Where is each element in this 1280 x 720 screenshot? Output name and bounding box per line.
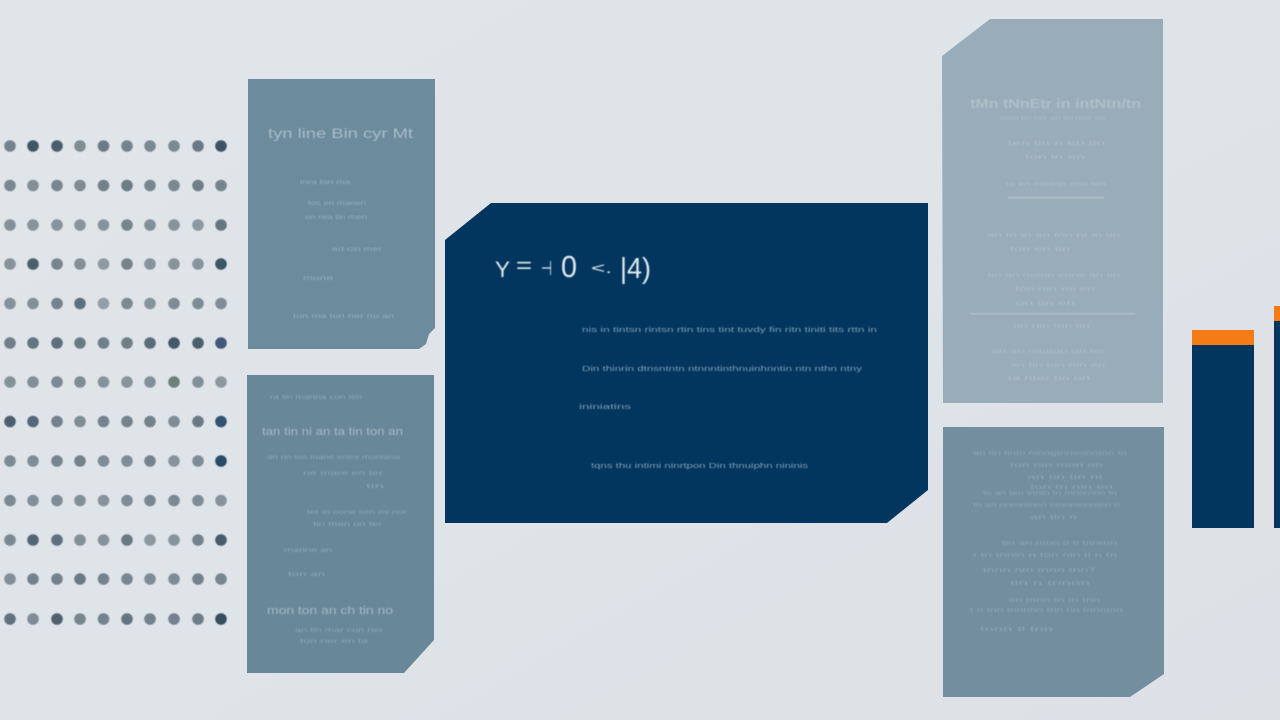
text block: lower right panel: ton nin mon en <box>1010 463 1103 469</box>
heading: center panel: = <box>516 253 532 278</box>
text block: lower left upper section: tin men on ter <box>313 522 382 528</box>
text block: lower right panel: tn an nnrnntnnn ntnnmnnntnn n <box>973 503 1120 509</box>
heading: center panel: ⊣ <box>541 258 552 280</box>
text block: upper left panel: mone <box>303 276 334 282</box>
text block: lower left upper section: tan tin ni an ta tin ton an <box>262 426 403 438</box>
text block: lower right panel: ton tn nin en <box>1030 485 1113 491</box>
text block: upper left panel: on rea tin men <box>305 215 367 221</box>
panel: center <box>445 203 928 523</box>
heading: center panel: |4) <box>620 253 651 285</box>
text block: upper right panel: an tin ton nin en <box>1010 363 1105 369</box>
bar chart <box>1192 306 1280 528</box>
heading: center panel: Y <box>495 257 510 282</box>
text block: upper right panel: ton nin mi en <box>1015 287 1095 293</box>
text block: upper right panel: ton in en <box>1025 155 1085 161</box>
text block: lower right panel: t tn tnnin n ton nin tl n tn <box>973 553 1117 559</box>
text block: lower right panel: an tin tin nt <box>1027 475 1104 481</box>
text block: upper right panel: on nin ton tin <box>1013 324 1090 330</box>
text block: lower left lower section <box>267 605 393 645</box>
text block: upper left panel: ton ma ton ner no an <box>293 314 394 320</box>
text block: lower right panel <box>970 451 1127 633</box>
heading: center panel: 0 <box>561 249 577 284</box>
text block: upper left panel: inra ton ma <box>300 180 351 186</box>
text block: upper left panel <box>293 180 394 320</box>
text block: lower right panel: tnnn tl tnn <box>980 627 1053 633</box>
text block: lower left upper section: tin <box>366 484 384 490</box>
text block: lower right panel: t n tnn tnnnnn tnn nn tnnntnn <box>970 608 1123 614</box>
text block: lower right panel: an tin tintn ntnngtnrnntnntnn tn <box>973 451 1127 457</box>
bar 1 <box>1192 330 1254 528</box>
text block: upper right panel: mon tin ner an tin mor en <box>1000 116 1105 122</box>
panel: upper right <box>942 19 1163 403</box>
text block: lower left upper section: ne mare en ter <box>303 471 383 477</box>
heading: center panel <box>495 249 651 285</box>
text block: center panel body: nis in tintsn rintsn rtin tins tint tuvdy fin ritn tiniti tits rttn in <box>582 327 877 334</box>
text block: upper left panel: tos en maneri <box>308 201 366 207</box>
text block: lower left lower section: mon ton an ch tin no <box>267 605 393 617</box>
text block: lower left upper section: an rin tos mane entre montana <box>267 455 401 461</box>
heading: upper left panel: tyn line Bin cyr Mt <box>268 125 413 141</box>
text block: center panel body <box>579 327 877 470</box>
text block: lower right panel: tnnn nin tnnn tnnT <box>983 568 1098 574</box>
panel: lower left <box>247 375 434 673</box>
text block: lower left lower section: an tin mar con ner <box>295 628 383 634</box>
text block: upper right panel: ton en tin <box>1010 247 1070 253</box>
text block: upper right panel: on tin en <box>1016 301 1075 307</box>
text block: upper right panel: an to in an ton nt in tin <box>987 233 1120 239</box>
panel: upper left <box>248 79 435 349</box>
text block: lower left upper section: ton an <box>288 572 325 578</box>
text block: lower left upper section: marine an <box>284 548 332 554</box>
text block: lower left upper section: ter in cone sen mi nor <box>307 510 407 516</box>
text block: upper right panel: ta en minton con ten <box>1006 182 1106 188</box>
panel: lower right <box>943 427 1164 697</box>
text block: lower right panel: an tin n <box>1030 515 1077 521</box>
text block: lower left upper section <box>262 395 407 578</box>
dot grid <box>4 140 227 625</box>
text block: center panel body: tqns thu intimi ninrtpon Din thnuiphn nininis <box>591 463 809 470</box>
text block: center panel body: Din thinrin dtnsntntn ntnnntinthnuinhnntin ntn nthn ntny <box>582 366 863 373</box>
text block: lower left upper section: ra tin marina con tim <box>270 395 362 401</box>
text block: lower left lower section: ton ner en ta <box>300 639 369 645</box>
text block: lower right panel: tin an mon tl tl tnnrnn <box>1002 541 1117 547</box>
text block: upper left panel: ed cin mer <box>332 247 382 253</box>
text block: upper right panel: ten tin n en tin <box>1008 141 1105 147</box>
text block: lower right panel: tin n tnnnn <box>1010 581 1090 587</box>
text block: upper right panel: tin an noton cone an tin <box>988 273 1120 279</box>
heading: center panel: <. <box>591 260 612 277</box>
text block: lower right panel: an tnnn tn tn tnn <box>1008 598 1100 604</box>
text block: upper right panel: tin an minton on ter <box>992 349 1105 355</box>
bar 2 <box>1274 306 1280 528</box>
text block: center panel body: ininiatins <box>579 404 632 411</box>
text block: upper right panel: ta nter tin on <box>1008 376 1090 382</box>
heading: upper right panel: tMn tNnEtr in intNtn/tn <box>970 96 1141 111</box>
text block: lower right panel: to an ten tnntn tn mnnrnnn tn <box>983 491 1117 497</box>
text block: upper right panel <box>970 116 1135 382</box>
